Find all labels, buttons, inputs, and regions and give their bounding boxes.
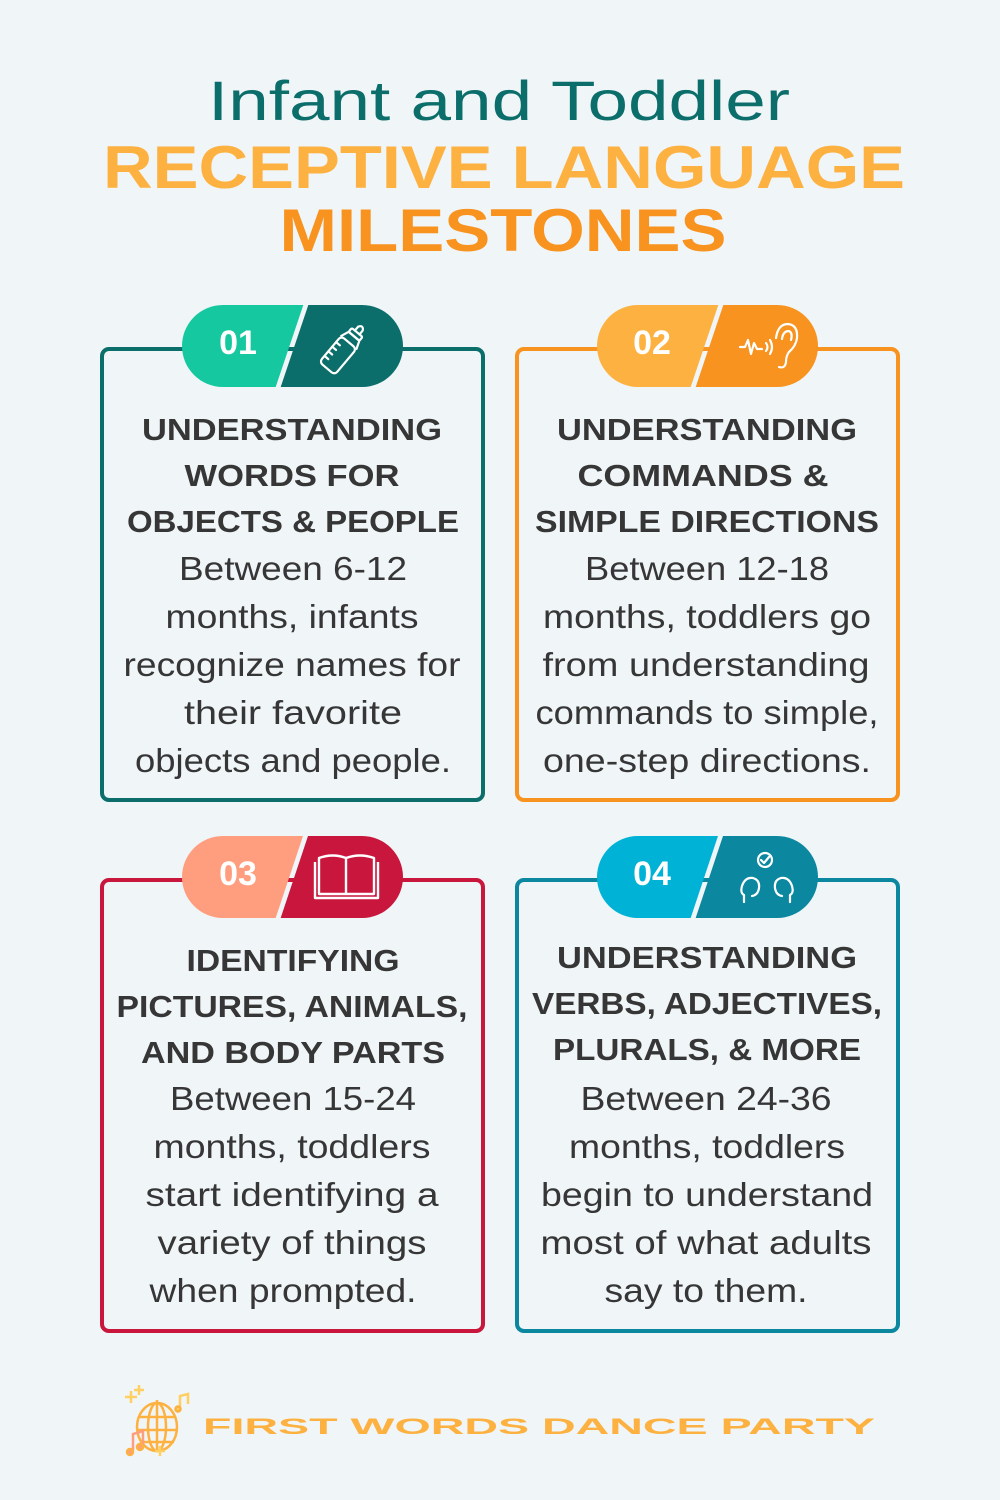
title: RECEPTIVE LANGUAGE	[103, 134, 905, 201]
panel: objects and people: UNDERSTANDING	[142, 412, 442, 447]
panel: commands and directions	[517, 300, 898, 800]
icon: ear	[740, 324, 797, 367]
panel: objects and people	[102, 300, 483, 800]
panel: verbs adjectives plurals: Between 24-36	[580, 1080, 832, 1117]
panel: objects and people: objects and people.	[135, 742, 451, 779]
footer logo	[125, 1385, 876, 1456]
panel: commands and directions: commands to simple,	[536, 694, 878, 731]
panel: objects and people: months, infants	[166, 598, 418, 635]
badge 03: 03	[219, 855, 257, 893]
panel: objects and people: WORDS FOR	[184, 458, 400, 493]
panel: objects and people: recognize names for	[124, 646, 461, 683]
panel: objects and people: Between 6-12	[179, 550, 407, 587]
panel: pictures animals body parts: IDENTIFYING	[186, 943, 400, 978]
badge 01	[182, 305, 403, 387]
panel: verbs adjectives plurals: VERBS, ADJECTIVES,	[532, 986, 882, 1021]
title	[103, 69, 905, 264]
panel: pictures animals body parts: when prompted.	[148, 1272, 416, 1309]
badge 03	[182, 836, 403, 918]
icon: disco globe	[125, 1385, 188, 1456]
panel: pictures animals body parts: variety of things	[158, 1224, 426, 1261]
panel: pictures animals body parts: PICTURES, ANIMALS,	[116, 989, 468, 1024]
panel: pictures animals body parts: AND BODY PARTS	[141, 1035, 445, 1070]
panel: verbs adjectives plurals	[517, 830, 898, 1331]
panel: commands and directions: UNDERSTANDING	[557, 412, 857, 447]
footer text: FIRST WORDS DANCE PARTY	[203, 1414, 876, 1439]
icon: people	[741, 853, 793, 902]
title: MILESTONES	[280, 197, 726, 264]
badge 04: 04	[633, 855, 671, 893]
panel: commands and directions: SIMPLE DIRECTIONS	[535, 504, 879, 539]
panel: objects and people: their favorite	[184, 694, 402, 731]
panel: commands and directions: one-step directions.	[543, 742, 871, 779]
panel: verbs adjectives plurals: begin to understand	[541, 1176, 873, 1213]
panel: commands and directions: Between 12-18	[585, 550, 829, 587]
panel: pictures animals body parts: Between 15-24	[170, 1080, 416, 1117]
panel: verbs adjectives plurals: say to them.	[604, 1272, 808, 1309]
badge 01: 01	[219, 324, 257, 362]
panel: objects and people: OBJECTS & PEOPLE	[127, 504, 459, 539]
panel: pictures animals body parts: start identifying a	[146, 1176, 439, 1213]
panel: commands and directions: months, toddlers go	[543, 598, 871, 635]
icon: book	[315, 856, 378, 898]
panel: verbs adjectives plurals: most of what adults	[540, 1224, 872, 1261]
panel: commands and directions: from understanding	[542, 646, 870, 683]
panel: pictures animals body parts	[102, 830, 483, 1331]
panel: verbs adjectives plurals: months, toddlers	[569, 1128, 845, 1165]
badge 02: 02	[633, 324, 671, 362]
icon: bottle	[320, 325, 364, 374]
badge 04	[597, 836, 818, 918]
badge 02	[597, 305, 818, 387]
title: Infant and Toddler	[208, 69, 790, 132]
panel: verbs adjectives plurals: UNDERSTANDING	[557, 940, 857, 975]
panel: commands and directions: COMMANDS &	[578, 458, 828, 493]
panel: verbs adjectives plurals: PLURALS, & MORE	[553, 1032, 861, 1067]
panel: pictures animals body parts: months, toddlers	[154, 1128, 430, 1165]
